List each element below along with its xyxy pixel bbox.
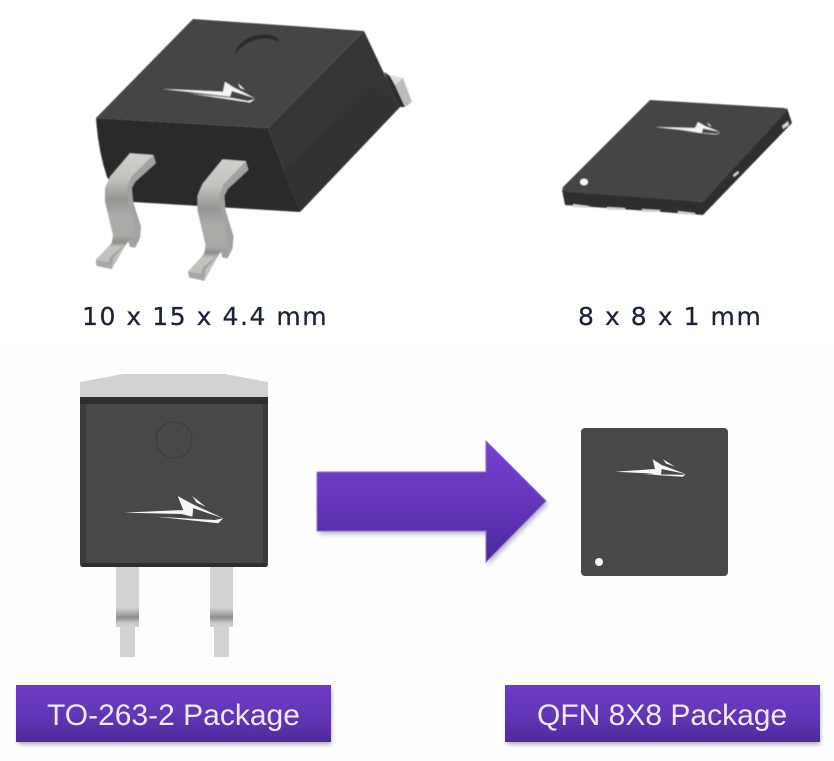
right lead — [210, 567, 233, 657]
package body — [96, 19, 400, 212]
front view QFN 8X8 — [581, 428, 728, 576]
3D QFN 8X8 package — [562, 100, 792, 215]
side faces — [562, 108, 792, 215]
pin 1 dot — [595, 558, 603, 566]
heat tab — [80, 374, 268, 398]
left lead — [116, 567, 139, 657]
label button: QFN 8X8: QFN 8X8 Package — [537, 699, 787, 732]
label button: TO-263-2: TO-263-2 Package — [47, 699, 300, 732]
label button: QFN 8X8 — [505, 685, 820, 744]
pin 1 dot — [580, 179, 588, 185]
label button: TO-263-2 — [16, 685, 331, 744]
background panel — [0, 345, 834, 761]
front view TO-263-2 — [80, 374, 268, 657]
logo on top face — [162, 82, 255, 102]
dimensions: QFN 8X8: 8 x 8 x 1 mm — [578, 302, 762, 331]
logo — [123, 496, 223, 523]
3D TO-263-2 package — [96, 19, 412, 281]
body — [80, 397, 268, 567]
top face — [562, 100, 787, 202]
logo — [615, 459, 686, 477]
logo — [655, 122, 720, 134]
dimensions: TO-263-2: 10 x 15 x 4.4 mm — [82, 302, 328, 331]
rear tab — [384, 72, 412, 107]
left lead — [96, 153, 156, 269]
arrow — [317, 441, 548, 565]
contact pads — [573, 121, 789, 215]
right lead — [188, 159, 248, 281]
